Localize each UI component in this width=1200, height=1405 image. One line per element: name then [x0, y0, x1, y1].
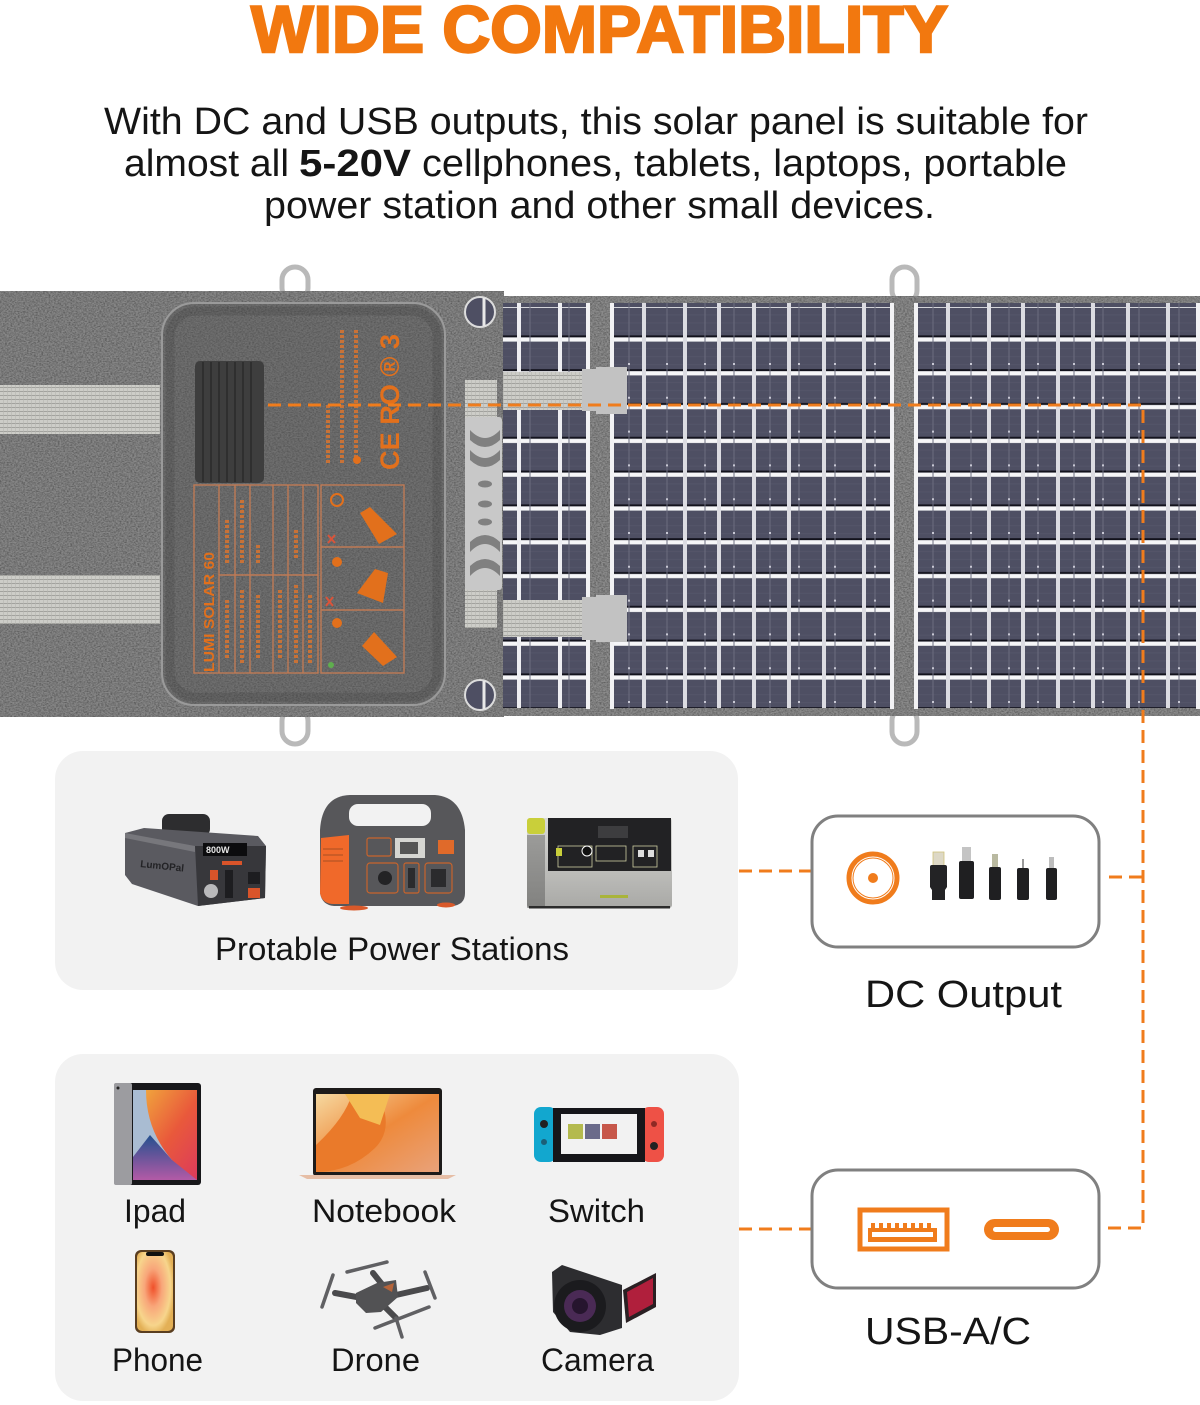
icon: power station 3 [527, 818, 672, 908]
USB output box [812, 1170, 1099, 1288]
icon: DC port [849, 854, 897, 902]
panel: portable power stations [55, 751, 738, 990]
solar cells: section 1 [503, 303, 587, 708]
device labels: Camera [541, 1342, 654, 1378]
icon: power station 2 [320, 795, 465, 910]
zip pocket [162, 303, 445, 705]
certification marks: CE RO ® 3 [375, 334, 405, 470]
label: Protable Power Stations [215, 931, 569, 967]
folding handle [465, 380, 502, 628]
panel: small devices [55, 1054, 739, 1401]
certification marks [328, 330, 405, 470]
icon: tablet [114, 1083, 201, 1185]
intro text block: cellphones, tablets, laptops, portable [422, 143, 1067, 185]
device labels: Drone [331, 1342, 420, 1378]
intro text block: power station and other small devices. [264, 185, 935, 227]
DC output box [812, 816, 1099, 947]
icon: notebook [299, 1088, 456, 1179]
intro text block [104, 101, 1088, 227]
solar panel product image [0, 267, 1200, 744]
solar cells: section 2 [613, 303, 891, 708]
fabric cover [0, 291, 1200, 717]
left straps [0, 385, 160, 624]
solar cells: section 3 [917, 303, 1196, 708]
device labels: Phone [112, 1342, 203, 1378]
icon: drone [322, 1262, 435, 1337]
intro text block: almost all [124, 143, 289, 185]
corner eyelets [465, 297, 495, 710]
USB label: USB-A/C [865, 1311, 1031, 1353]
device labels: Ipad [124, 1193, 186, 1229]
printed specification label: LUMI SOLAR 60 [201, 552, 218, 672]
intro text block: 5-20V [299, 143, 412, 185]
orange dashed connection lines [268, 405, 1143, 1229]
white panel edges [588, 303, 1198, 709]
icon: power station 1: LumOPal [140, 859, 185, 875]
icon: game console [534, 1107, 664, 1162]
junction box [195, 361, 264, 483]
device labels [112, 1193, 654, 1378]
icon: power station 1 [125, 814, 266, 906]
fold straps with buckles [503, 367, 627, 642]
icon: USB-C port [984, 1219, 1059, 1240]
hanging loops [282, 267, 917, 744]
icon: power station 1: 800W [206, 845, 230, 855]
icon: camera [552, 1265, 656, 1335]
DC output label: DC Output [865, 974, 1062, 1016]
device labels: Switch [548, 1193, 645, 1229]
intro text block: With DC and USB outputs, this solar panel is suitable for [104, 101, 1088, 143]
printed specification label [194, 485, 404, 673]
icon: DC adapter tips [930, 847, 1057, 900]
icon: USB-A port [860, 1210, 947, 1249]
icon: phone [135, 1250, 175, 1333]
device labels: Notebook [312, 1193, 457, 1229]
